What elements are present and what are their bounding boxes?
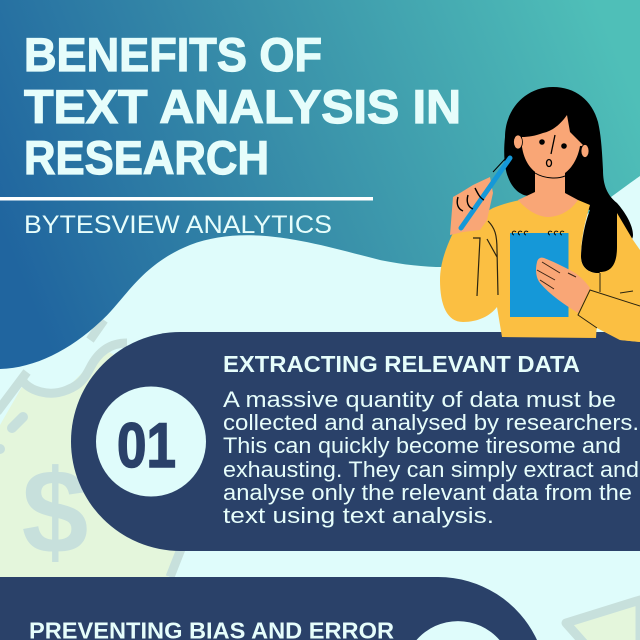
right cuff — [578, 290, 640, 342]
panel body text: exhausting. They can simply extract and — [223, 457, 639, 482]
sleeve lines — [473, 221, 498, 296]
decorative paper shape, lower right — [566, 600, 640, 640]
neck — [518, 170, 578, 217]
right ear — [581, 144, 589, 158]
notepad — [510, 231, 568, 317]
title: TEXT ANALYSIS IN — [24, 80, 461, 133]
subtitle: BYTESVIEW ANALYTICS — [24, 211, 332, 239]
fingers — [457, 188, 484, 211]
face — [522, 115, 584, 178]
number badge — [96, 386, 206, 496]
hair back — [504, 87, 633, 273]
number badge: 01 — [117, 411, 176, 481]
title: RESEARCH — [24, 131, 269, 184]
number badge — [416, 621, 500, 640]
chin line — [535, 173, 565, 178]
left ear — [514, 135, 522, 149]
illustration: woman with notepad — [440, 87, 640, 342]
panel body text: analyse only the relevant data from the — [223, 480, 632, 505]
cuff outlines — [578, 273, 640, 328]
icon: dollar sign: $ — [22, 445, 88, 579]
panel body text: A massive quantity of data must be — [223, 387, 616, 412]
panel heading: EXTRACTING RELEVANT DATA — [223, 351, 580, 377]
panel body text — [223, 387, 639, 528]
right sleeve — [578, 213, 640, 342]
yellow sweater — [440, 200, 600, 338]
panel body text: collected and analysed by researchers. — [223, 410, 639, 435]
face features — [539, 135, 567, 166]
hand holding pen — [450, 177, 493, 235]
hand on notepad — [536, 258, 590, 313]
title — [24, 28, 461, 184]
panel: 02 preventing bias and error — [0, 577, 537, 640]
pen — [461, 158, 510, 228]
panel: 01 extracting relevant data — [71, 332, 640, 551]
gradient header wave — [0, 0, 640, 369]
title divider — [0, 197, 373, 200]
panel body text: text using text analysis. — [223, 503, 494, 528]
title: BENEFITS OF — [24, 28, 322, 81]
panel body text: This can quickly become tiresome and — [223, 433, 621, 458]
decorative money bag — [0, 320, 200, 579]
